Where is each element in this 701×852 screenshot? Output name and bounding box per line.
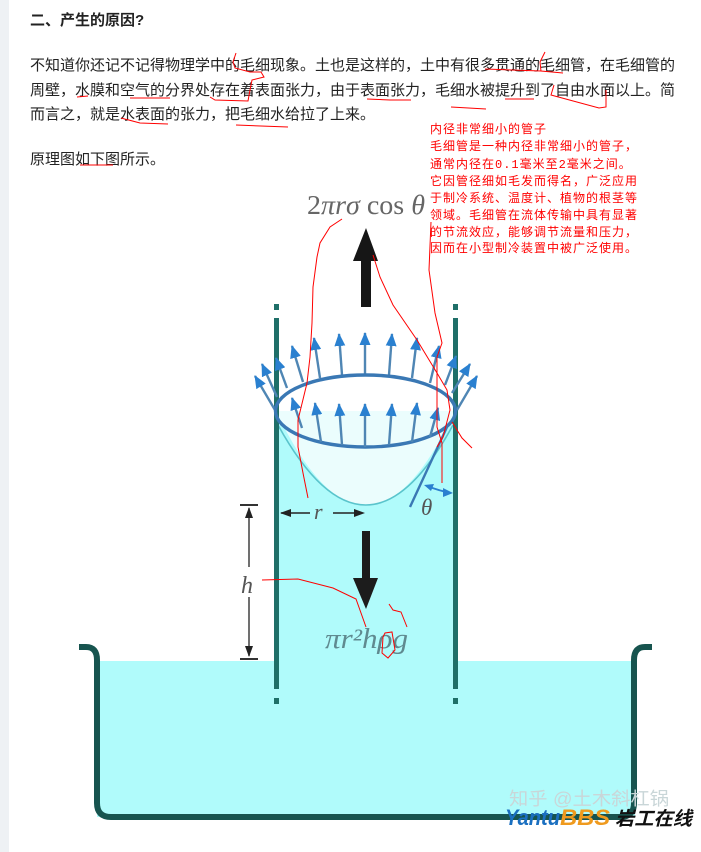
container xyxy=(79,647,652,817)
red hand annotations on diagram xyxy=(262,219,472,658)
logo xyxy=(505,805,694,830)
meniscus ellipse xyxy=(276,375,456,447)
heading: 二、产生的原因? xyxy=(30,12,144,29)
label: r with arrows xyxy=(280,499,365,524)
meniscus parabola xyxy=(278,425,453,505)
red hand annotations on text xyxy=(77,52,606,165)
left edge strip xyxy=(0,0,9,852)
watermark: 知乎 @土木斜杠锅 xyxy=(509,789,669,809)
red annotation text: 领域。毛细管在流体传输中具有显著 xyxy=(430,209,638,223)
red annotation text: 通常内径在0.1毫米至2毫米之间。 xyxy=(430,158,632,172)
tension arrows: front xyxy=(292,398,438,447)
dimension h: h xyxy=(241,573,253,599)
bath water xyxy=(97,661,635,817)
contact angle: θ xyxy=(421,495,432,520)
logo: Yantu xyxy=(505,805,561,830)
label: r with arrows: r xyxy=(314,499,323,524)
meniscus interior xyxy=(276,411,455,506)
arrow: downward force xyxy=(353,531,378,609)
tube walls xyxy=(274,304,458,704)
paragraph: explanation: 周壁，水膜和空气的分界处存在着表面张力，由于表面张力，毛细水被提升到了自由水面以上。简 xyxy=(30,82,675,99)
caption line: 原理图如下图所示。 xyxy=(30,151,165,168)
logo: BBS xyxy=(560,805,610,830)
red annotation text xyxy=(430,122,638,256)
red annotation text: 内径非常细小的管子 xyxy=(430,123,547,137)
dimension h xyxy=(240,505,258,659)
paragraph: explanation: 不知道你还记不记得物理学中的毛细现象。土也是这样的，土中有很多贯通的毛细管，在毛细管的 xyxy=(30,57,675,74)
arrow: upward force xyxy=(353,228,378,307)
logo: 岩工在线 xyxy=(615,808,694,830)
paragraph: explanation: 而言之，就是水表面的张力，把毛细水给拉了上来。 xyxy=(30,106,375,123)
tube water xyxy=(276,415,455,662)
contact angle xyxy=(410,427,453,520)
red annotation text: 它因管径细如毛发而得名，广泛应用 xyxy=(430,175,638,189)
red annotation text: 的节流效应，能够调节流量和压力， xyxy=(430,226,638,240)
formula: upward force: 2πrσ cos θ xyxy=(307,190,425,220)
formula: weight: πr²hρg xyxy=(325,624,408,655)
red annotation text: 毛细管是一种内径非常细小的管子， xyxy=(430,140,638,154)
tension arrows: back xyxy=(255,333,477,410)
red annotation text: 于制冷系统、温度计、植物的根茎等 xyxy=(430,192,638,206)
paragraph: explanation xyxy=(30,57,675,123)
red annotation text: 因而在小型制冷装置中被广泛使用。 xyxy=(430,242,638,256)
